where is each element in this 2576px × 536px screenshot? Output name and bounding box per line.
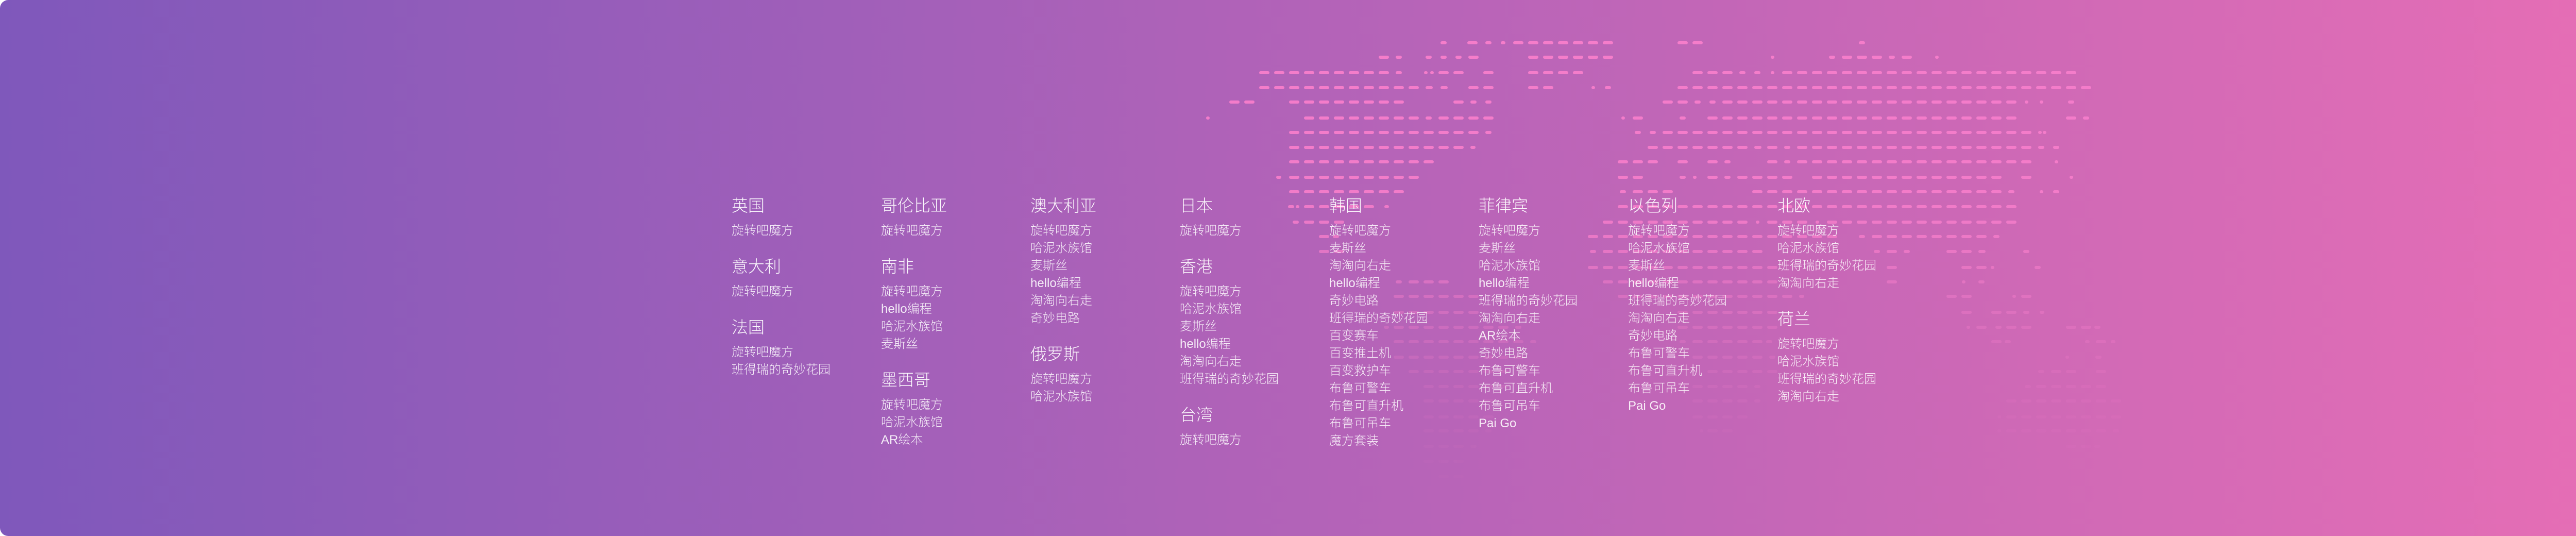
column 7 xyxy=(1628,196,1727,413)
region: 澳大利亚: 奇妙电路 xyxy=(1030,311,1080,325)
region: 以色列: 布鲁可直升机 xyxy=(1628,364,1702,378)
region: 菲律宾: AR绘本 xyxy=(1479,329,1520,343)
region: 意大利: 意大利 xyxy=(732,257,781,276)
region: 以色列: 以色列 xyxy=(1628,196,1677,215)
column 6 xyxy=(1479,196,1578,430)
region: 南非: 旋转吧魔方 xyxy=(881,284,943,298)
region: 韩国: 布鲁可直升机 xyxy=(1329,399,1403,413)
region: 南非: 南非 xyxy=(881,257,914,276)
region: 台湾: 旋转吧魔方 xyxy=(1180,433,1242,447)
region: 韩国: 旋转吧魔方 xyxy=(1329,224,1391,238)
region: 韩国: 百变救护车 xyxy=(1329,364,1391,378)
region: 澳大利亚: 旋转吧魔方 xyxy=(1030,224,1092,238)
column 2 xyxy=(881,196,947,447)
region: 菲律宾: 布鲁可吊车 xyxy=(1479,399,1540,413)
region: 荷兰: 旋转吧魔方 xyxy=(1777,337,1839,351)
region: 英国 xyxy=(732,196,793,238)
region: 哥伦比亚: 旋转吧魔方 xyxy=(881,224,943,238)
region: 菲律宾: 布鲁可警车 xyxy=(1479,364,1540,378)
region: 澳大利亚: hello编程 xyxy=(1030,276,1081,290)
region: 韩国: 布鲁可警车 xyxy=(1329,381,1391,395)
region: 菲律宾: 菲律宾 xyxy=(1479,196,1528,215)
column 3 xyxy=(1030,196,1096,404)
region: 北欧 xyxy=(1777,196,1876,290)
region: 法国 xyxy=(732,318,831,377)
region: 以色列: 布鲁可吊车 xyxy=(1628,381,1690,395)
region: 菲律宾: 奇妙电路 xyxy=(1479,346,1528,360)
region: 南非: hello编程 xyxy=(881,302,932,316)
region: 俄罗斯: 哈泥水族馆 xyxy=(1030,390,1092,404)
region: 墨西哥: 旋转吧魔方 xyxy=(881,398,943,412)
region: 菲律宾 xyxy=(1479,196,1578,430)
region: 韩国: 淘淘向右走 xyxy=(1329,259,1391,273)
region: 韩国: 布鲁可吊车 xyxy=(1329,416,1391,430)
region: 台湾 xyxy=(1180,406,1242,447)
column 5 xyxy=(1329,196,1428,448)
region: 北欧: 北欧 xyxy=(1777,196,1810,215)
region: 香港: 旋转吧魔方 xyxy=(1180,284,1242,298)
region: 韩国: 魔方套装 xyxy=(1329,434,1379,448)
region: 英国: 旋转吧魔方 xyxy=(732,224,793,238)
region: 韩国: 班得瑞的奇妙花园 xyxy=(1329,311,1428,325)
region: 法国: 旋转吧魔方 xyxy=(732,345,793,359)
region: 以色列: 麦斯丝 xyxy=(1628,259,1665,273)
column 1 xyxy=(732,196,831,377)
region: 荷兰: 哈泥水族馆 xyxy=(1777,355,1839,368)
region: 荷兰 xyxy=(1777,310,1876,404)
region: 以色列: 奇妙电路 xyxy=(1628,329,1677,343)
region: 俄罗斯: 旋转吧魔方 xyxy=(1030,372,1092,386)
region: 香港 xyxy=(1180,257,1279,386)
region: 台湾: 台湾 xyxy=(1180,406,1213,424)
region: 北欧: 旋转吧魔方 xyxy=(1777,224,1839,238)
region: 以色列: 哈泥水族馆 xyxy=(1628,241,1690,255)
region: 荷兰: 荷兰 xyxy=(1777,310,1810,328)
column 4 xyxy=(1180,196,1279,447)
region: 荷兰: 淘淘向右走 xyxy=(1777,390,1839,404)
region: 香港: 淘淘向右走 xyxy=(1180,355,1242,368)
region: 香港: 哈泥水族馆 xyxy=(1180,302,1242,316)
region: 菲律宾: Pai Go xyxy=(1479,416,1516,430)
region: 菲律宾: 布鲁可直升机 xyxy=(1479,381,1553,395)
region: 菲律宾: 淘淘向右走 xyxy=(1479,311,1540,325)
region: 墨西哥: 哈泥水族馆 xyxy=(881,415,943,429)
region: 日本 xyxy=(1180,196,1242,238)
region: 法国: 班得瑞的奇妙花园 xyxy=(732,363,831,377)
region: 韩国: 韩国 xyxy=(1329,196,1362,215)
region: 菲律宾: 麦斯丝 xyxy=(1479,241,1516,255)
region: 以色列: 旋转吧魔方 xyxy=(1628,224,1690,238)
region: 澳大利亚: 澳大利亚 xyxy=(1030,196,1096,215)
region: 墨西哥: AR绘本 xyxy=(881,433,923,447)
region: 香港: 麦斯丝 xyxy=(1180,320,1217,333)
region: 菲律宾: 哈泥水族馆 xyxy=(1479,259,1540,273)
region: 北欧: 哈泥水族馆 xyxy=(1777,241,1839,255)
region: 澳大利亚: 哈泥水族馆 xyxy=(1030,241,1092,255)
region: 澳大利亚 xyxy=(1030,196,1096,325)
region: 韩国: 奇妙电路 xyxy=(1329,294,1379,308)
region: 澳大利亚: 麦斯丝 xyxy=(1030,259,1067,273)
region: 以色列: 布鲁可警车 xyxy=(1628,346,1690,360)
region: 南非: 哈泥水族馆 xyxy=(881,320,943,333)
region: 澳大利亚: 淘淘向右走 xyxy=(1030,294,1092,308)
region: 南非 xyxy=(881,257,943,351)
region: 南非: 麦斯丝 xyxy=(881,337,918,351)
region: 北欧: 淘淘向右走 xyxy=(1777,276,1839,290)
region: 以色列: 淘淘向右走 xyxy=(1628,311,1690,325)
region: 意大利: 旋转吧魔方 xyxy=(732,284,793,298)
region: 香港: 班得瑞的奇妙花园 xyxy=(1180,372,1279,386)
region: 意大利 xyxy=(732,257,793,298)
column 8 xyxy=(1777,196,1876,404)
region: 荷兰: 班得瑞的奇妙花园 xyxy=(1777,372,1876,386)
region: 香港: hello编程 xyxy=(1180,337,1231,351)
region: 韩国: 百变推土机 xyxy=(1329,346,1391,360)
region: 韩国: 麦斯丝 xyxy=(1329,241,1366,255)
region: 北欧: 班得瑞的奇妙花园 xyxy=(1777,259,1876,273)
region: 以色列 xyxy=(1628,196,1727,413)
region: 香港: 香港 xyxy=(1180,257,1213,276)
region: 韩国: 百变赛车 xyxy=(1329,329,1379,343)
region: 以色列: hello编程 xyxy=(1628,276,1679,290)
region: 日本: 旋转吧魔方 xyxy=(1180,224,1242,238)
region: 法国: 法国 xyxy=(732,318,765,337)
region: 以色列: Pai Go xyxy=(1628,399,1666,413)
region: 韩国 xyxy=(1329,196,1428,448)
region: 英国: 英国 xyxy=(732,196,765,215)
region: 墨西哥: 墨西哥 xyxy=(881,371,930,389)
region: 菲律宾: hello编程 xyxy=(1479,276,1530,290)
region: 哥伦比亚: 哥伦比亚 xyxy=(881,196,947,215)
region: 日本: 日本 xyxy=(1180,196,1213,215)
region: 墨西哥 xyxy=(881,371,943,447)
region: 俄罗斯: 俄罗斯 xyxy=(1030,345,1080,363)
region: 韩国: hello编程 xyxy=(1329,276,1380,290)
region: 菲律宾: 班得瑞的奇妙花园 xyxy=(1479,294,1578,308)
region: 哥伦比亚 xyxy=(881,196,947,238)
region: 菲律宾: 旋转吧魔方 xyxy=(1479,224,1540,238)
region: 以色列: 班得瑞的奇妙花园 xyxy=(1628,294,1727,308)
region: 俄罗斯 xyxy=(1030,345,1092,404)
